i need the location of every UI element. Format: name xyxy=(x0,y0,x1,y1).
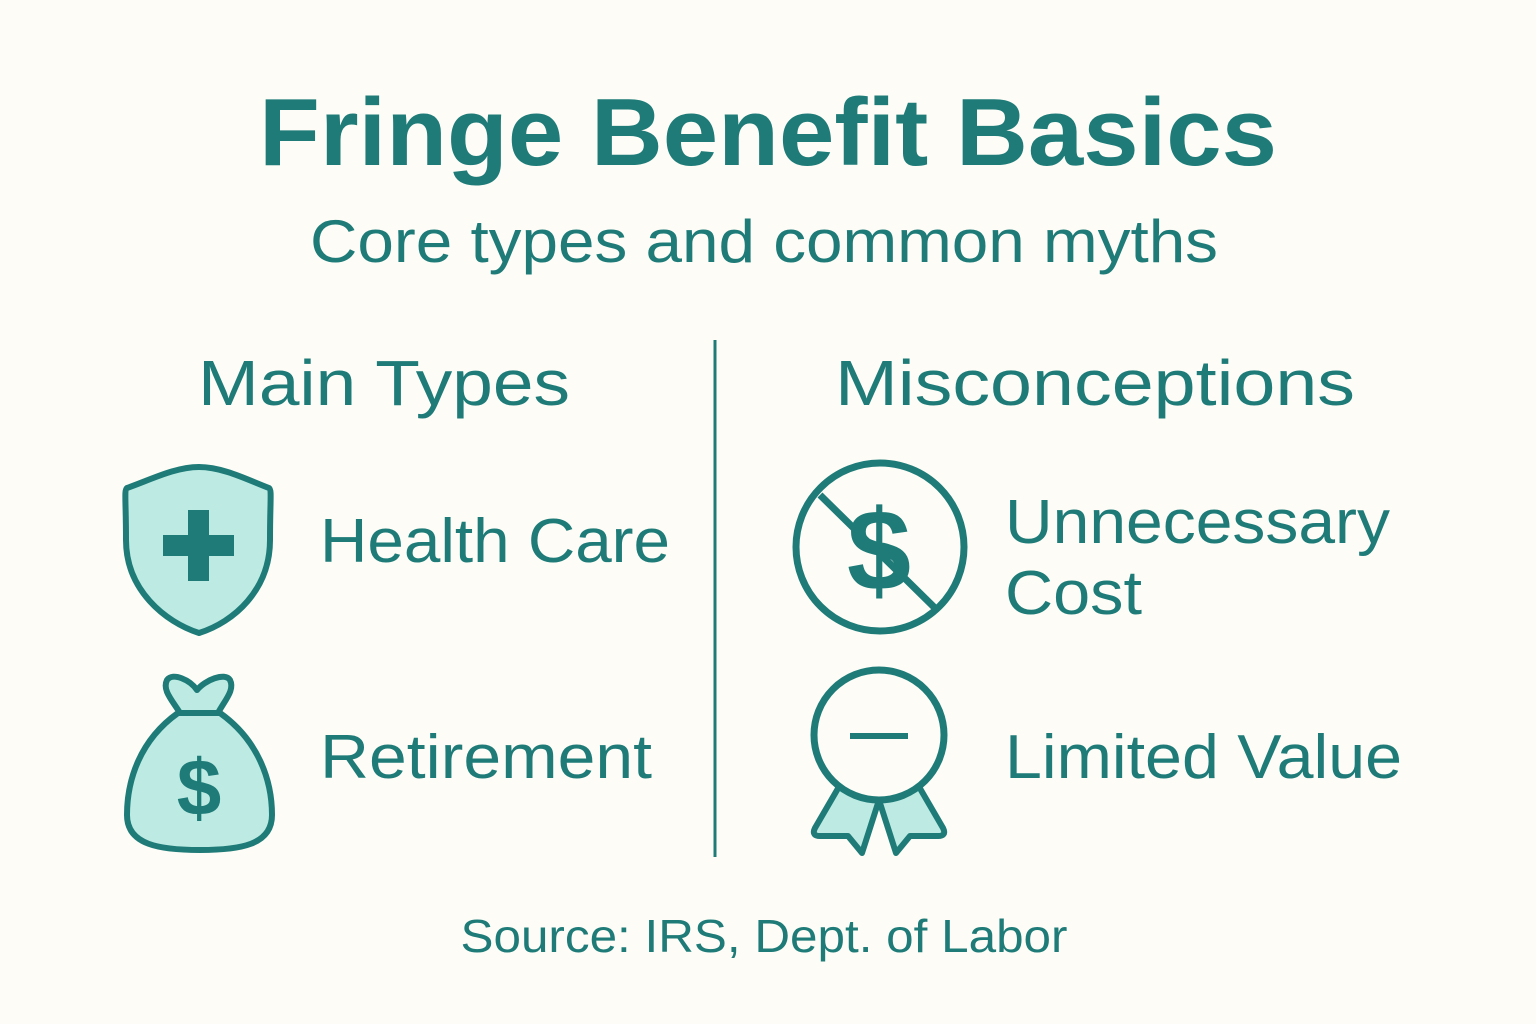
icon: shield with cross xyxy=(125,467,271,633)
label: Health Care: Health Care xyxy=(320,507,670,576)
title: Fringe Benefit Basics xyxy=(259,79,1277,186)
icon: money bag xyxy=(127,677,272,850)
icon: no dollar: $ xyxy=(847,487,911,615)
icon: ribbon with minus xyxy=(814,670,944,853)
source: Source: IRS, Dept. of Labor xyxy=(460,910,1068,962)
label: Unnecessary Cost: Cost xyxy=(1005,559,1142,628)
label: Unnecessary Cost xyxy=(1005,488,1390,628)
heading: Misconceptions: Misconceptions xyxy=(835,347,1355,419)
heading: Main Types: Main Types xyxy=(198,347,570,419)
label: Unnecessary Cost: Unnecessary xyxy=(1005,488,1390,557)
subtitle: Core types and common myths xyxy=(310,208,1218,275)
icon: no dollar xyxy=(796,463,964,631)
label: Retirement: Retirement xyxy=(320,723,652,792)
icon: money bag: $ xyxy=(177,743,221,832)
label: Limited Value: Limited Value xyxy=(1005,723,1402,792)
